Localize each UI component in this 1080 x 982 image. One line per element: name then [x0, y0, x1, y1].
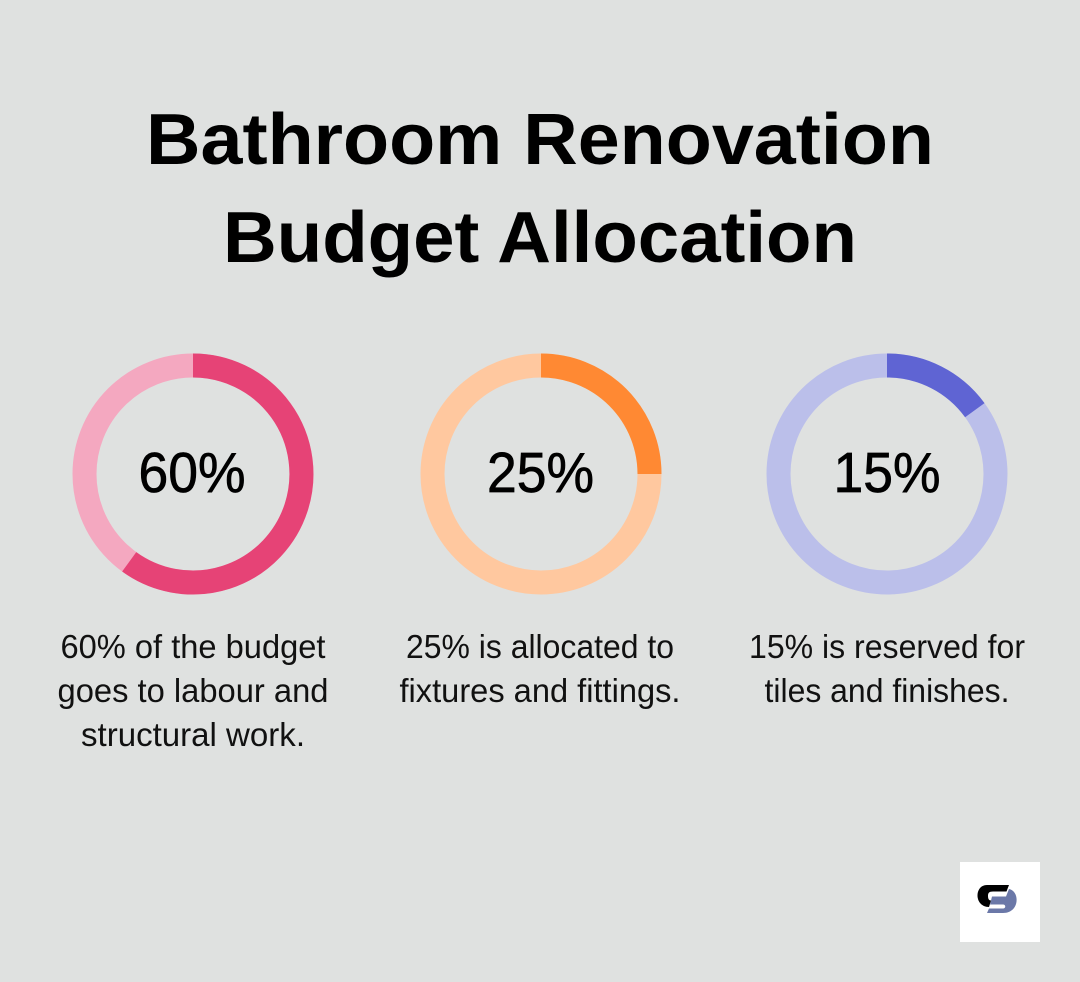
description: labour: structural work.	[81, 716, 305, 753]
donut chart: 15%	[778, 366, 996, 582]
value: 15%: 15%	[834, 441, 940, 505]
donut chart: 60%	[84, 366, 302, 582]
value: 60%: 60%	[138, 441, 246, 505]
description: fixtures: fixtures and fittings.	[400, 672, 680, 709]
description: fixtures	[400, 628, 680, 709]
description: tiles: 15% is reserved for	[749, 628, 1025, 665]
panel: labour and structural work 60%	[58, 366, 328, 753]
panel: tiles and finishes 15%	[749, 366, 1025, 709]
title: Bathroom Renovation	[146, 100, 934, 180]
donut chart: 25%	[432, 366, 650, 582]
description: labour	[58, 628, 328, 753]
description: fixtures: 25% is allocated to	[406, 628, 674, 665]
description: labour: goes to labour and	[58, 672, 328, 709]
title: Budget Allocation	[223, 198, 857, 278]
description: tiles: tiles and finishes.	[764, 672, 1010, 709]
panel: fixtures and fittings 25%	[400, 366, 680, 709]
description: labour: 60% of the budget	[60, 628, 326, 665]
title	[146, 100, 934, 278]
logo	[960, 862, 1040, 942]
description: tiles	[749, 628, 1025, 709]
value: 25%: 25%	[487, 441, 594, 505]
